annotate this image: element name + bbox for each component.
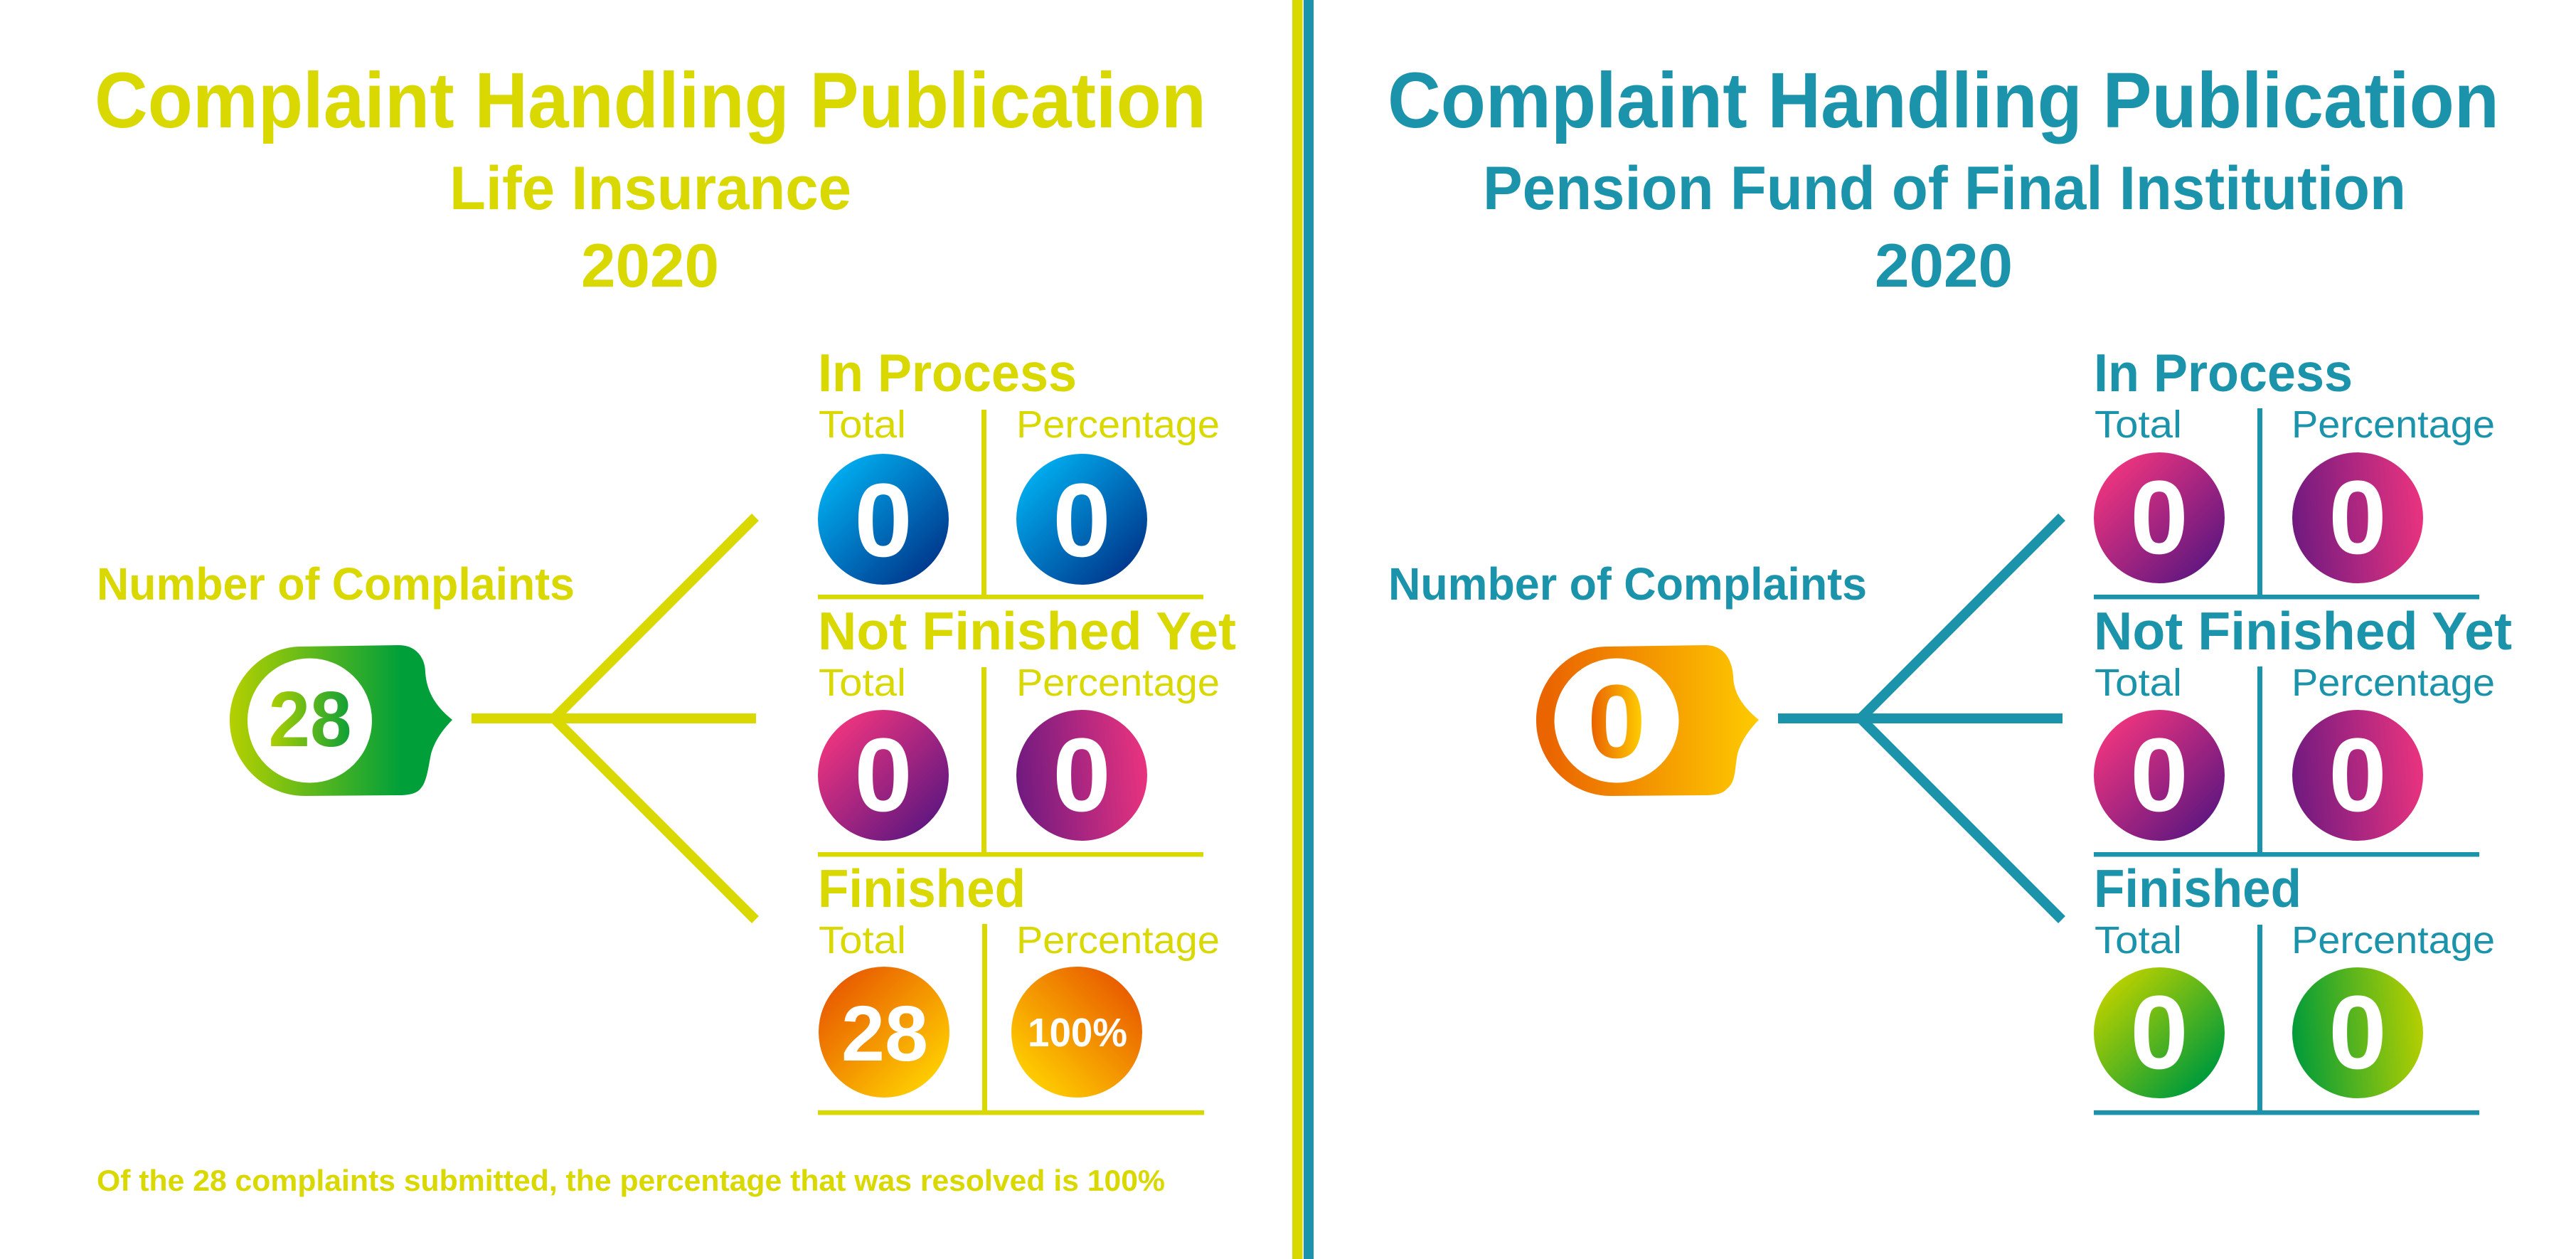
connector arrows bbox=[1778, 517, 2063, 920]
section: finished bbox=[2094, 859, 2495, 1115]
section: in process: 0 bbox=[2130, 459, 2188, 576]
title: Complaint Handling Publication bbox=[1388, 57, 2499, 144]
section: not finished yet bbox=[818, 601, 1236, 856]
badge: total complaints 0 bbox=[1536, 645, 1759, 796]
section: finished: 28 bbox=[841, 990, 928, 1078]
section: in process: In Process bbox=[2094, 343, 2353, 403]
section: finished: 0 bbox=[2328, 974, 2387, 1091]
section: in process bbox=[2094, 343, 2495, 599]
section: not finished yet: Percentage bbox=[2292, 662, 2495, 704]
section: finished: Total bbox=[2095, 919, 2182, 962]
section: not finished yet: Not Finished Yet bbox=[818, 601, 1236, 661]
section: in process bbox=[818, 343, 1220, 599]
section: finished: Percentage bbox=[2292, 919, 2495, 962]
connector arrows bbox=[472, 517, 756, 920]
section: in process: 0 bbox=[2328, 459, 2387, 576]
badge: total complaints 0: 0 bbox=[1587, 664, 1646, 780]
section: not finished yet: Total bbox=[2095, 662, 2182, 704]
center divider bbox=[1292, 0, 1314, 1259]
section: not finished yet: 0 bbox=[2130, 717, 2188, 834]
label: number of complaints: Number of Complaints bbox=[97, 558, 575, 610]
section: not finished yet: Not Finished Yet bbox=[2094, 601, 2512, 661]
title: Complaint Handling Publication bbox=[95, 57, 1206, 144]
section: not finished yet: 0 bbox=[854, 717, 912, 834]
year: 2020 bbox=[581, 232, 719, 300]
section: finished: Finished bbox=[818, 859, 1026, 918]
section: in process: Percentage bbox=[2292, 403, 2495, 446]
panel: life insurance bbox=[95, 57, 1236, 1197]
panel: pension fund bbox=[1388, 57, 2512, 1115]
section: in process: 0 bbox=[854, 462, 912, 579]
year: 2020 bbox=[1875, 232, 2013, 300]
badge: total complaints 28: 28 bbox=[269, 676, 351, 763]
section: in process: Percentage bbox=[1016, 403, 1220, 446]
section: finished: 100% bbox=[1028, 1010, 1127, 1056]
section: finished: Total bbox=[819, 919, 906, 962]
section: in process: In Process bbox=[818, 343, 1077, 403]
section: in process: Total bbox=[2095, 403, 2182, 446]
section: not finished yet: 0 bbox=[1053, 717, 1111, 834]
section: finished bbox=[818, 859, 1220, 1115]
section: in process: 0 bbox=[1053, 462, 1111, 579]
section: not finished yet: Total bbox=[819, 662, 906, 704]
section: not finished yet bbox=[2094, 601, 2512, 856]
footnote: Of the 28 complaints submitted, the percentage that was resolved is 100% bbox=[97, 1164, 1165, 1197]
section: finished: 0 bbox=[2130, 974, 2188, 1091]
subtitle: life insurance: Life Insurance bbox=[449, 154, 851, 223]
label: number of complaints: Number of Complaints bbox=[1388, 558, 1867, 610]
badge: total complaints 28 bbox=[230, 645, 452, 796]
section: finished: Finished bbox=[2094, 859, 2301, 918]
section: not finished yet: 0 bbox=[2328, 717, 2387, 834]
section: finished: Percentage bbox=[1016, 919, 1220, 962]
section: not finished yet: Percentage bbox=[1016, 662, 1220, 704]
subtitle: pension fund: Pension Fund of Final Institution bbox=[1483, 154, 2406, 223]
section: in process: Total bbox=[819, 403, 906, 446]
